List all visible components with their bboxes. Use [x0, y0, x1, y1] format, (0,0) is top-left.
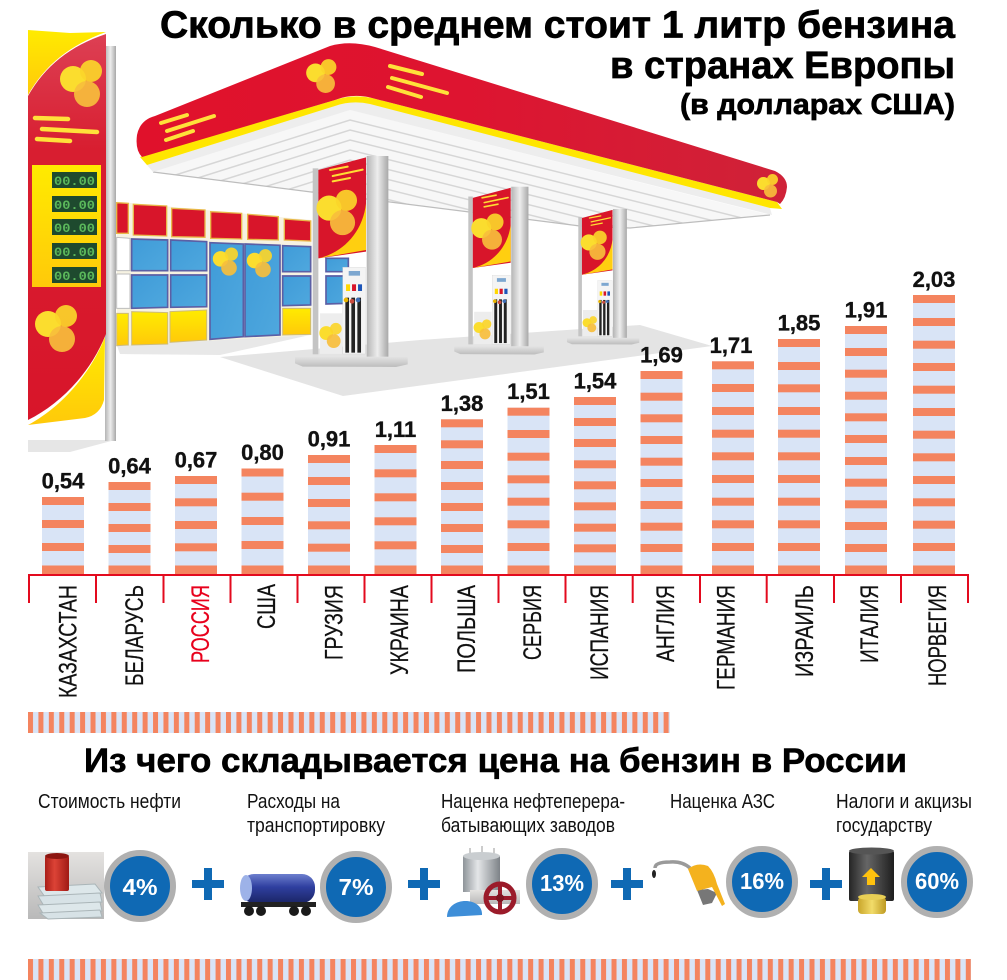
title: [160, 4, 956, 121]
percent circle: 16%: [740, 868, 784, 894]
country labels: ИСПАНИЯ: [586, 585, 614, 680]
bar: Израиль 1,85: [778, 310, 820, 574]
icon: refinery tank, helmet and valve: [447, 846, 520, 917]
country labels: СЕРБИЯ: [519, 585, 547, 660]
percent circle: 4%: [122, 874, 158, 900]
bar: Казахстан 0,54: [42, 468, 85, 574]
bar: Сербия 1,51: [507, 379, 550, 574]
icon: black barrel with coins and arrow: [849, 848, 894, 914]
caption: Налоги и акцизы: [836, 791, 972, 813]
country labels: БЕЛАРУСЬ: [121, 585, 149, 686]
bar: Украина 1,11: 1,11: [375, 417, 416, 442]
bar: Испания 1,54: 1,54: [574, 368, 617, 394]
bar: Россия 0,67: 0,67: [175, 448, 217, 472]
price pylon: [28, 30, 116, 452]
bar: Норвегия 2,03: 2,03: [913, 267, 955, 292]
caption: [441, 791, 625, 837]
price component: transportation 7%: [240, 791, 389, 920]
bar: Сербия 1,51: 1,51: [507, 379, 550, 404]
bar: США 0,80: 0,80: [241, 440, 284, 465]
caption: Наценка нефтеперера-: [441, 791, 625, 813]
plus sign: [408, 868, 440, 900]
fuel pillar 3: [567, 209, 639, 344]
bar: Грузия 0,91: [308, 426, 350, 574]
bar: Украина 1,11: [374, 417, 416, 574]
country labels: ГРУЗИЯ: [320, 585, 348, 660]
bar: США 0,80: [241, 440, 284, 574]
country labels: ГЕРМАНИЯ: [712, 585, 740, 690]
percent circle: 60%: [915, 868, 959, 894]
canopy fascia: [137, 43, 787, 215]
price component: taxes 60%: [836, 791, 972, 915]
fuel pillar 1: [295, 156, 408, 367]
price panel: [32, 165, 101, 287]
chart axis with ticks: [28, 574, 969, 603]
caption: Наценка АЗС: [670, 791, 775, 813]
plus sign: [810, 868, 842, 900]
icon: fuel nozzle with drop: [652, 862, 725, 906]
shop building: [117, 202, 348, 355]
caption: Стоимость нефти: [38, 791, 181, 813]
country labels: НОРВЕГИЯ: [924, 585, 952, 686]
canopy ceiling: [153, 119, 770, 229]
country labels: ПОЛЬША: [453, 585, 481, 673]
price component: station markup 16%: [652, 791, 795, 915]
percent circle: [323, 854, 389, 920]
price panel: 00.00: [54, 221, 95, 236]
caption: государству: [836, 815, 932, 837]
price component: refinery markup 13%: [441, 791, 625, 917]
bar: Россия 0,67: [175, 448, 217, 574]
price panel: 00.00: [54, 198, 95, 213]
bar: Англия 1,69: 1,69: [640, 342, 683, 368]
percent circle: 13%: [540, 870, 584, 896]
fuel pillar 2: [454, 187, 544, 354]
title: Сколько в среднем стоит 1 литр бензина: [160, 4, 956, 46]
icon: rail tank car: [240, 874, 316, 916]
bar: Польша 1,38: [441, 391, 483, 574]
bar: Испания 1,54: [574, 368, 617, 574]
caption: Расходы на: [247, 791, 341, 813]
bar: Израиль 1,85: 1,85: [778, 310, 820, 336]
bar: Беларусь 0,64: 0,64: [108, 454, 152, 478]
percent circle: [529, 851, 595, 917]
bar: Англия 1,69: [640, 342, 683, 574]
percent circle: [107, 853, 173, 919]
bar: Германия 1,71: 1,71: [710, 333, 752, 358]
ground shadow: [220, 325, 712, 396]
title: (в долларах США): [680, 89, 955, 121]
icon: oil barrel on banknotes: [28, 852, 104, 919]
caption: батывающих заводов: [441, 815, 615, 837]
caption: [247, 791, 385, 837]
bar chart: petrol price by country: [28, 267, 969, 698]
bar: Беларусь 0,64: [108, 454, 152, 574]
country labels: США: [253, 584, 281, 629]
bar: Польша 1,38: 1,38: [441, 391, 483, 416]
country labels: ИТАЛИЯ: [856, 585, 884, 663]
illustration: gas station: [28, 30, 800, 452]
caption: транспортировку: [247, 815, 385, 837]
plus sign: [192, 868, 224, 900]
section heading: Из чего складывается цена на бензин в России: [84, 742, 907, 780]
striped footer band: [28, 959, 971, 980]
bar: Грузия 0,91: 0,91: [308, 426, 350, 452]
country labels: АНГЛИЯ: [652, 585, 680, 662]
price component: oil cost 4%: [28, 791, 181, 919]
bar: Норвегия 2,03: [913, 267, 955, 574]
country labels: КАЗАХСТАН: [54, 585, 82, 698]
bar: Италия 1,91: [845, 298, 887, 574]
title: в странах Европы: [610, 45, 955, 87]
bar: Казахстан 0,54: 0,54: [42, 468, 85, 494]
caption: [836, 791, 972, 837]
country labels: УКРАИНА: [386, 585, 414, 675]
bar: Германия 1,71: [710, 333, 754, 574]
price panel: 00.00: [54, 174, 95, 189]
percent circle: [729, 849, 795, 915]
bar: Италия 1,91: 1,91: [845, 298, 887, 322]
percent circle: 7%: [338, 874, 374, 900]
price panel: 00.00: [54, 245, 95, 260]
price panel: 00.00: [54, 269, 95, 284]
country labels: [54, 584, 952, 698]
plus sign: [611, 868, 643, 900]
country labels: ИЗРАИЛЬ: [791, 585, 819, 677]
country labels: РОССИЯ: [187, 585, 215, 663]
striped divider: [28, 712, 670, 733]
